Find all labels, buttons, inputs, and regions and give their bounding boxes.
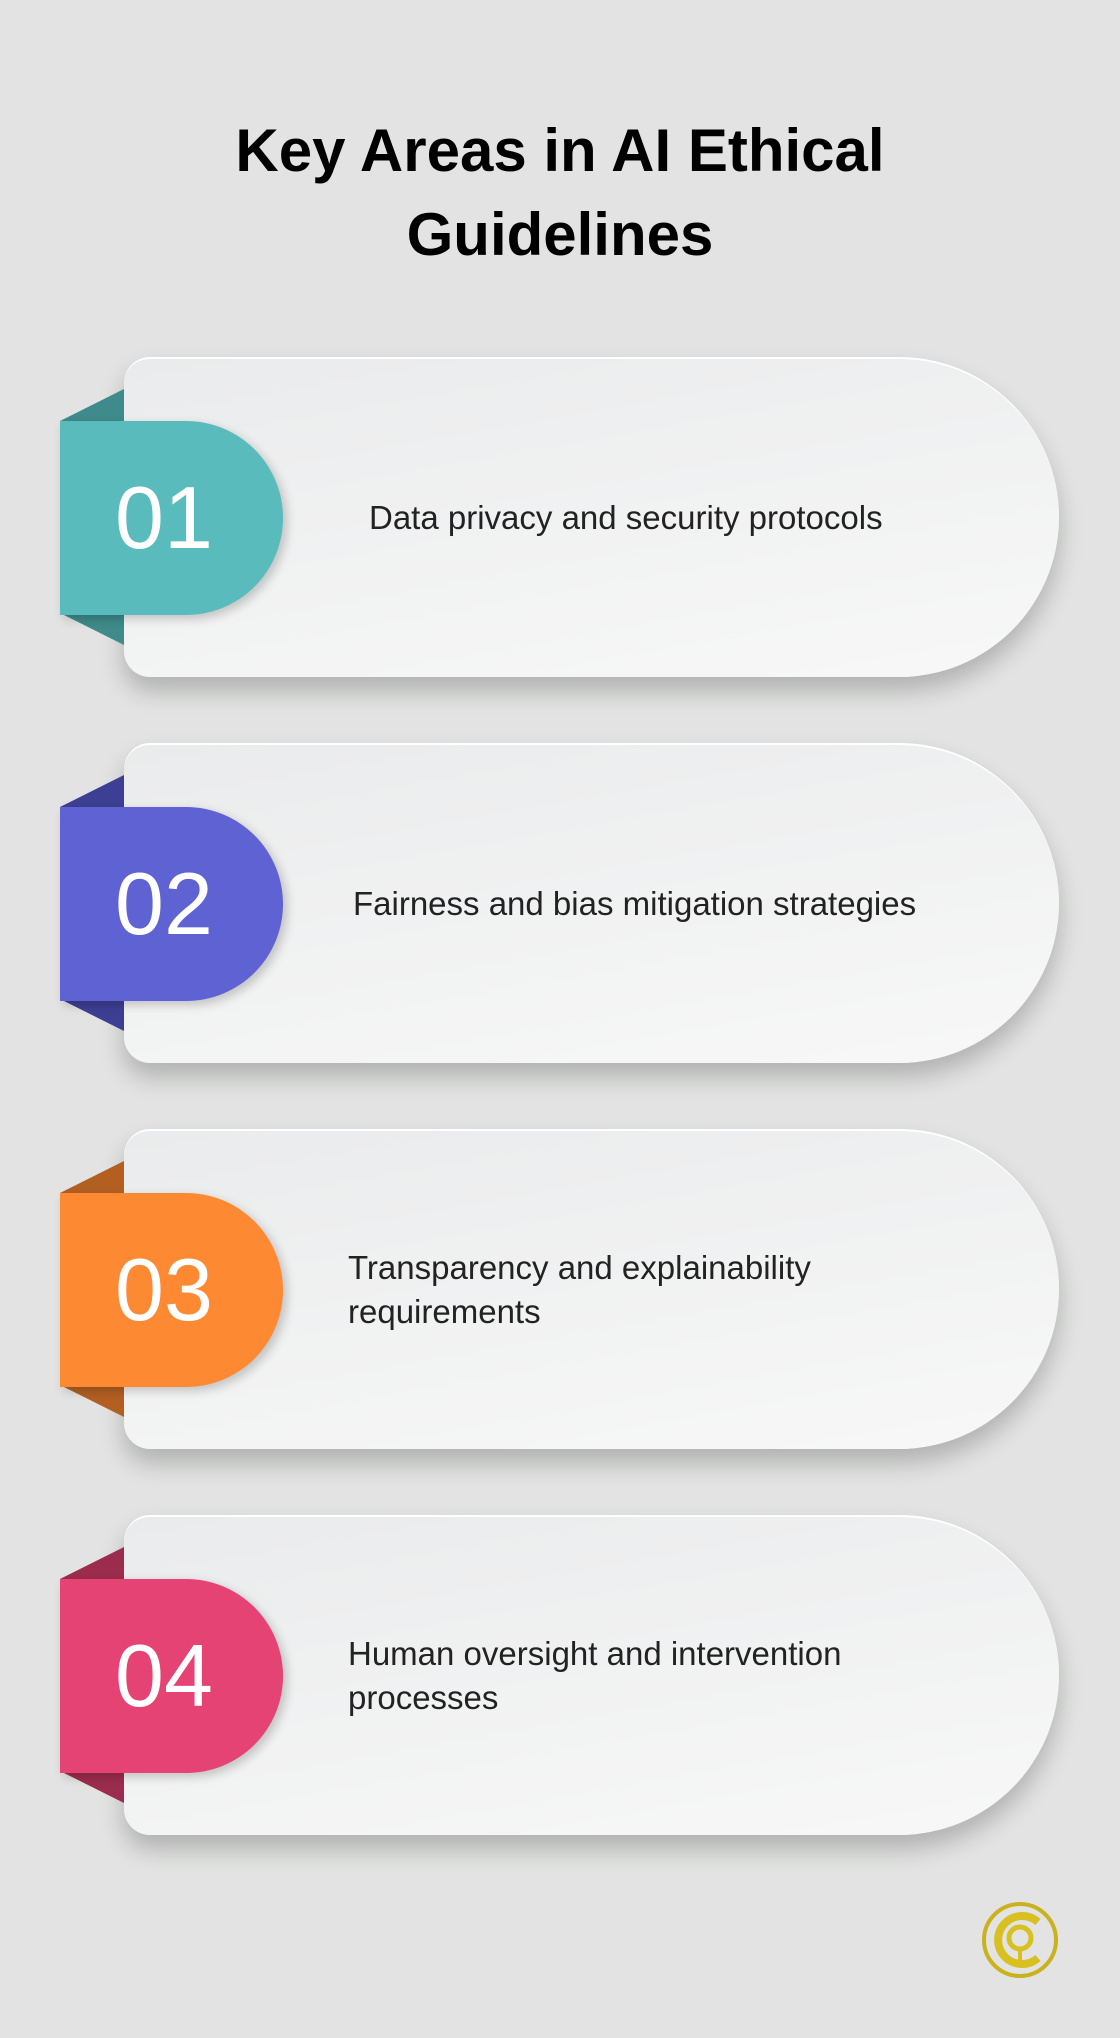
card background bbox=[124, 743, 1059, 1063]
text 04: processes bbox=[348, 1679, 498, 1716]
text 04: Human oversight and intervention bbox=[348, 1635, 841, 1672]
card background bbox=[124, 1515, 1059, 1835]
card background bbox=[124, 357, 1059, 677]
fold bbox=[60, 1161, 124, 1417]
text 03: Transparency and explainability bbox=[348, 1249, 811, 1286]
card background bbox=[124, 1129, 1059, 1449]
panel: item 01 bbox=[60, 357, 1070, 702]
text 04 bbox=[348, 1635, 841, 1716]
badge 03 bbox=[60, 1193, 283, 1387]
text 01: Data privacy and security protocols bbox=[369, 499, 883, 536]
fold bbox=[60, 389, 124, 645]
text 03: requirements bbox=[348, 1293, 541, 1330]
title: Guidelines bbox=[407, 201, 713, 268]
panel: item 03 bbox=[60, 1129, 1070, 1474]
panel: item 02 bbox=[60, 743, 1070, 1088]
icon: logo bbox=[982, 1902, 1058, 1978]
badge 02: 02 bbox=[115, 854, 213, 953]
text 02: Fairness and bias mitigation strategies bbox=[353, 885, 916, 922]
text 03 bbox=[348, 1249, 811, 1330]
title: Key Areas in AI Ethical bbox=[235, 117, 885, 184]
fold bbox=[60, 1547, 124, 1803]
badge 04: 04 bbox=[115, 1626, 213, 1725]
badge 01 bbox=[60, 421, 283, 615]
panel: item 04 bbox=[60, 1515, 1070, 1860]
title bbox=[235, 117, 885, 268]
badge 02 bbox=[60, 807, 283, 1001]
badge 01: 01 bbox=[115, 468, 213, 567]
badge 03: 03 bbox=[115, 1240, 213, 1339]
badge 04 bbox=[60, 1579, 283, 1773]
fold bbox=[60, 775, 124, 1031]
